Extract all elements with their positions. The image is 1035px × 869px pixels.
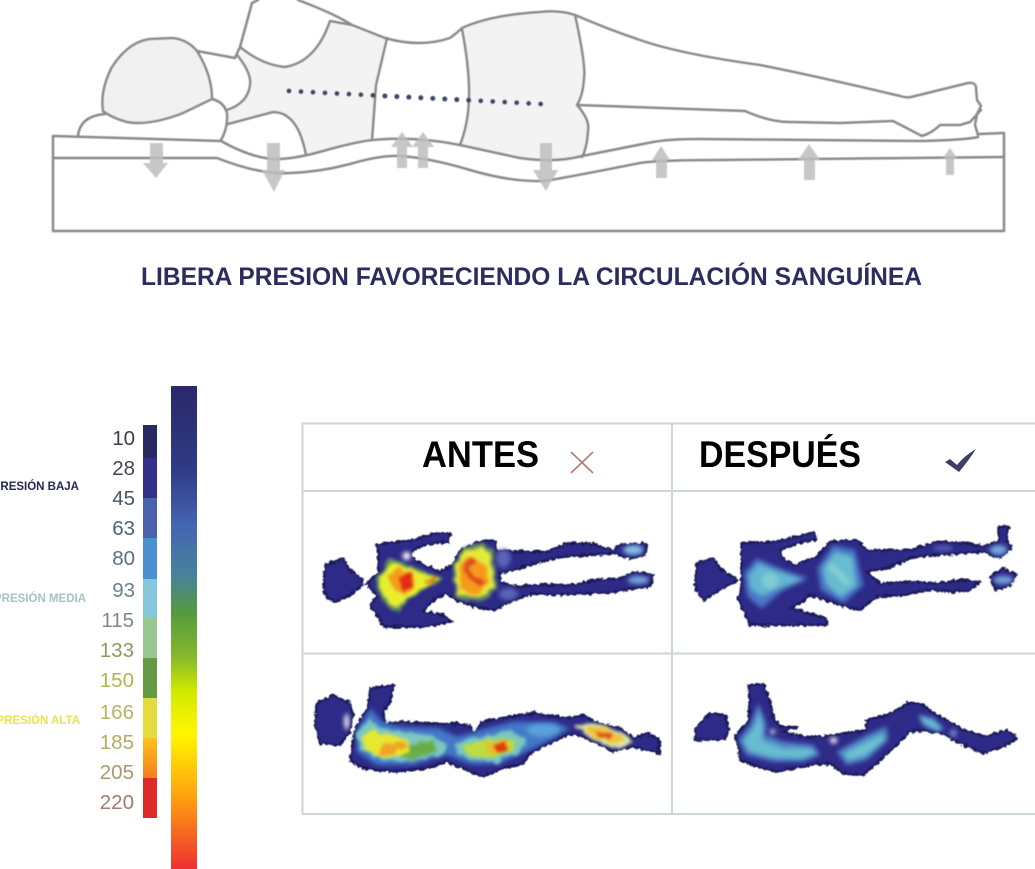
leg lines xyxy=(577,105,981,136)
pressure labels xyxy=(0,480,86,727)
pressure values: 45 xyxy=(112,487,135,510)
continuous colour scale xyxy=(171,386,197,869)
pressure values: 166 xyxy=(100,701,134,724)
pressure values: 80 xyxy=(112,547,135,570)
pressure values: 93 xyxy=(112,579,135,602)
heading: after: DESPUÉS xyxy=(699,434,861,475)
hip shaded area xyxy=(460,12,588,160)
pressure values: 185 xyxy=(100,731,134,754)
pressure values: 150 xyxy=(100,669,134,692)
pressure arrows xyxy=(143,132,957,192)
stepped colour scale xyxy=(143,425,157,818)
icon: check xyxy=(945,449,976,472)
pressure values: 115 xyxy=(101,609,134,632)
heatmap: after, side view xyxy=(695,684,1017,775)
pressure values: 10 xyxy=(112,427,135,450)
pillow xyxy=(78,99,227,140)
heatmap: before, top view xyxy=(323,533,653,627)
heatmap: before, side view xyxy=(315,685,660,777)
arm and shoulder lines xyxy=(227,21,352,155)
waist and hip lines xyxy=(372,15,588,157)
dotted spine line xyxy=(289,91,541,104)
title: LIBERA PRESION FAVORECIENDO LA CIRCULACIÓN SANGUÍNEA xyxy=(141,261,922,291)
pressure values: 63 xyxy=(112,517,135,540)
pressure values: 28 xyxy=(112,457,135,480)
torso shaded area xyxy=(227,21,385,155)
comparison table xyxy=(302,423,1035,814)
table grid xyxy=(302,423,1035,814)
icon: cross xyxy=(571,452,593,473)
pressure values: 133 xyxy=(100,639,134,662)
mattress xyxy=(53,133,1004,231)
body outline xyxy=(197,0,981,135)
pressure values: 205 xyxy=(100,761,134,784)
pressure values xyxy=(100,427,135,814)
heading: before: ANTES xyxy=(422,434,539,475)
head xyxy=(102,38,212,123)
pressure values: 220 xyxy=(100,791,134,814)
heatmap: after, top view xyxy=(695,527,1017,625)
illustration: person lying on mattress xyxy=(53,0,1004,231)
